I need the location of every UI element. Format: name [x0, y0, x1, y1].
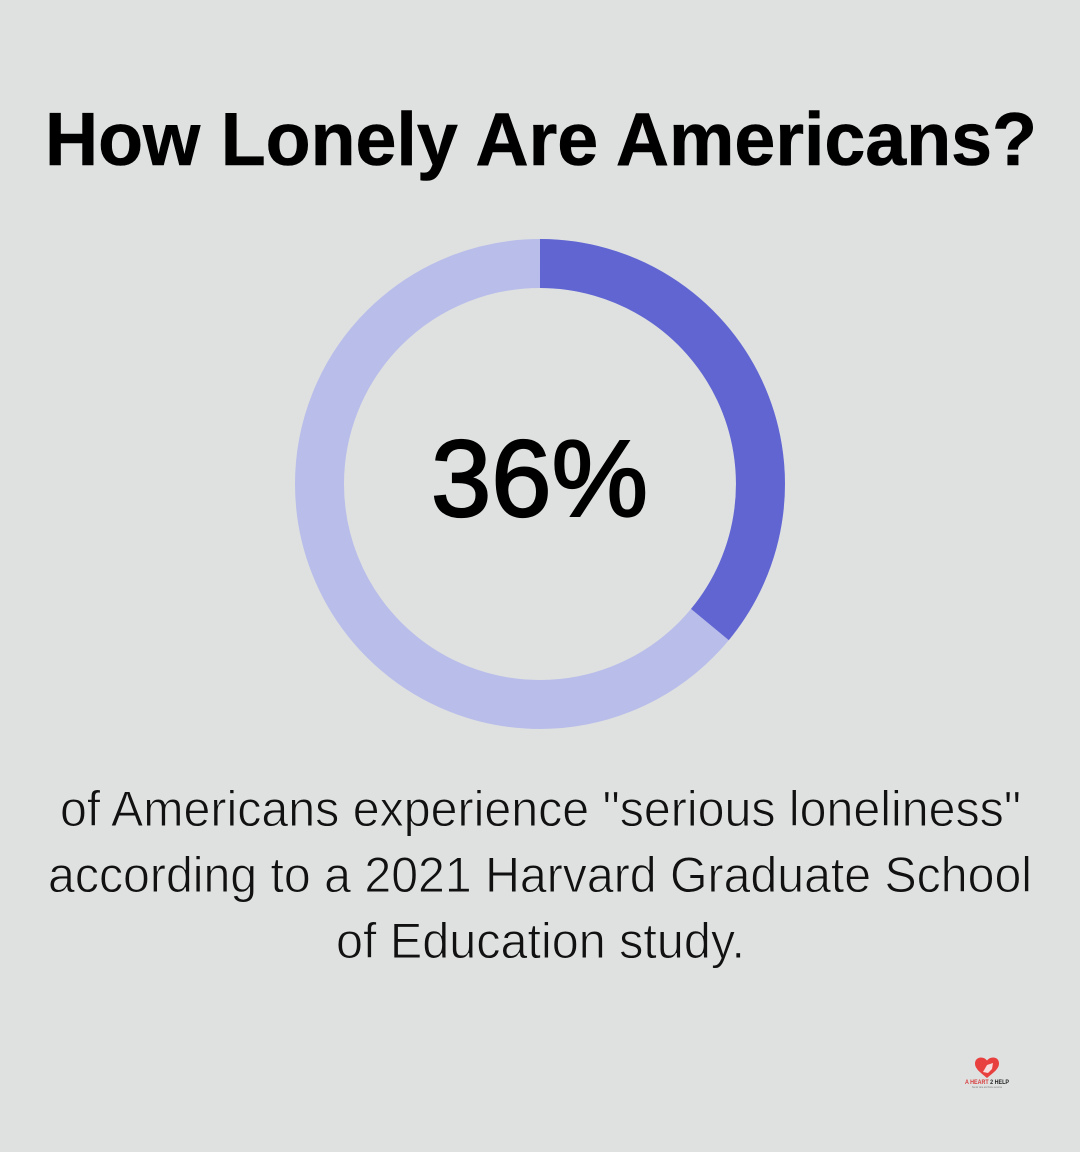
donut value arc: [540, 264, 760, 624]
description line 3: of Education study.: [336, 913, 745, 969]
description line 2: according to a 2021 Harvard Graduate School: [48, 847, 1032, 903]
donut track: [320, 264, 760, 704]
logo: A Heart 2 Help: [965, 1058, 1010, 1089]
logo tagline: Senior care and home services: [972, 1086, 1003, 1089]
icon: heart with hands: [975, 1058, 999, 1078]
logo wordmark: A HEART 2 HELP: [965, 1079, 1010, 1086]
title: How Lonely Are Americans?: [45, 97, 1037, 181]
description text: [48, 781, 1032, 969]
donut chart: 36%: [320, 264, 760, 704]
center value: 36%: [431, 418, 648, 540]
description line 1: of Americans experience "serious loneliness": [60, 781, 1021, 837]
